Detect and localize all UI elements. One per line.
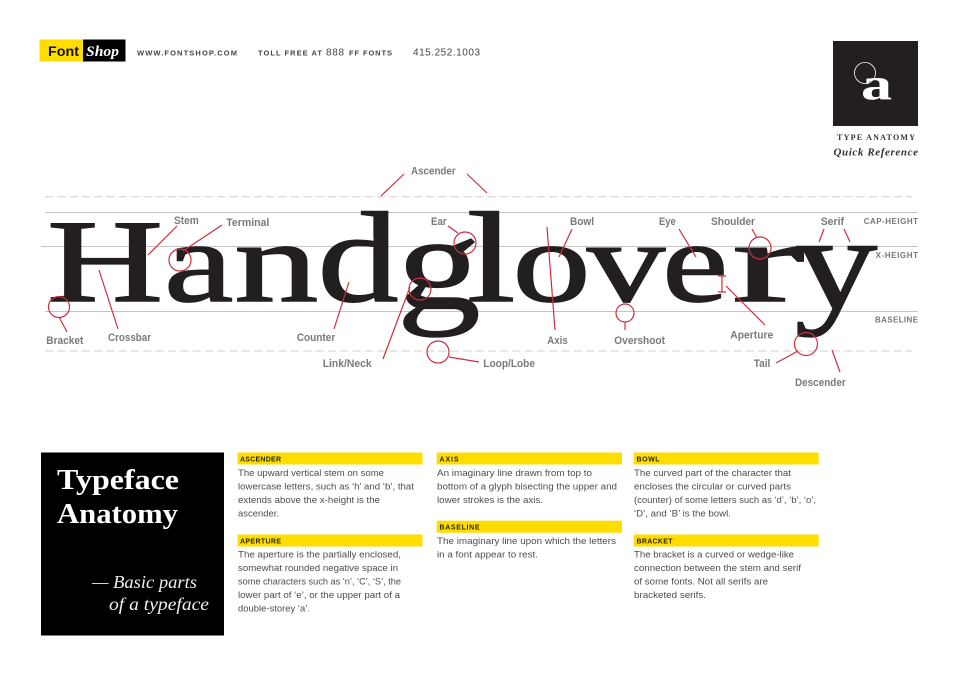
definition: bowl: ‘D’, and ‘B’ is the bowl. [634, 508, 731, 520]
callout: tail [754, 332, 818, 370]
specimen word: Handglovery: r [732, 199, 805, 326]
definition: aperture: somewhat rounded negative space in [238, 563, 398, 574]
badge title: TYPE ANATOMY [837, 133, 915, 142]
specimen word: Handglovery: d [318, 186, 399, 329]
definition: bracket: The bracket is a curved or wedge-like [634, 550, 794, 560]
toll free number: TOLL FREE AT [258, 48, 322, 57]
definition: bracket: connection between the stem and serif [634, 563, 801, 574]
callout: overshoot: Overshoot [614, 335, 665, 347]
callout: link/neck: Link/Neck [323, 358, 373, 370]
definition: axis: AXIS [440, 456, 459, 464]
definition: aperture: double-storey ‘a’. [238, 604, 310, 614]
callout: crossbar [99, 270, 152, 344]
definition: aperture: lower part of ‘e’, or the upper part of a [238, 590, 401, 601]
website address: WWW.FONTSHOP.COM [137, 48, 237, 57]
definition: bracket: BRACKET [636, 538, 673, 546]
callout: shoulder: Shoulder [711, 216, 756, 228]
definition: ascender: ASCENDER [240, 456, 281, 464]
icon: type anatomy badge [833, 41, 918, 126]
callout: bracket: Bracket [46, 335, 84, 347]
label: cap-height: CAP-HEIGHT [864, 217, 918, 226]
label: baseline: BASELINE [875, 316, 919, 325]
definition: aperture: The aperture is the partially enclosed, [238, 550, 401, 560]
panel: title block: — Basic parts [91, 572, 197, 592]
guide lines [41, 197, 918, 351]
badge subtitle: Quick Reference [834, 146, 918, 158]
definition: bowl: The curved part of the character that [634, 468, 791, 479]
definition: aperture [238, 534, 422, 614]
definition: bowl [634, 452, 819, 520]
callout: bowl: Bowl [570, 216, 594, 228]
callout: descender [795, 350, 846, 389]
phone number: 415.252.1003 [413, 48, 480, 58]
callout: terminal [169, 217, 269, 271]
definition: ascender [238, 452, 422, 520]
definition: baseline [437, 521, 622, 560]
specimen word: Handglovery: a [164, 199, 233, 326]
FontShop logo: Font [48, 43, 79, 59]
callout: descender: Descender [795, 377, 846, 389]
callout: axis [547, 227, 568, 347]
specimen word: Handglovery: v [587, 199, 666, 326]
definition: axis [437, 452, 622, 506]
definition: bowl: encloses the circular or curved parts [634, 482, 791, 492]
callout: ascender: Ascender [411, 166, 456, 178]
FontShop logo: Shop [86, 44, 120, 60]
definition: baseline: BASELINE [440, 525, 480, 532]
panel: title block [41, 452, 224, 636]
definition: axis: bottom of a glyph bisecting the upper and [437, 482, 617, 492]
definition: bowl: BOWL [636, 456, 660, 464]
definition: ascender: ascender. [238, 508, 279, 520]
definition: bowl: (counter) of some letters such as ‘d’, ‘b’, ‘o’, [634, 495, 816, 506]
specimen word: Handglovery: e [662, 199, 728, 326]
panel: title block: of a typeface [109, 594, 209, 614]
callout: stem: Stem [174, 215, 199, 227]
callout: terminal: Terminal [226, 217, 269, 229]
definition: aperture: some characters such as ‘n’, ‘C’, ‘S’, the [238, 576, 401, 588]
definition: axis: lower strokes is the axis. [437, 495, 543, 506]
specimen word: Handglovery [47, 186, 877, 337]
panel: title block: Anatomy [57, 498, 179, 530]
callout: crossbar: Crossbar [108, 332, 152, 344]
callout: stem [148, 215, 199, 255]
callout: eye [659, 216, 696, 257]
specimen word: Handglovery: H [47, 196, 163, 327]
toll free number: FF FONTS [349, 48, 392, 57]
callout: counter: Counter [297, 332, 336, 344]
callout: loop/lobe [427, 341, 535, 370]
definition: ascender: lowercase letters, such as ‘h’ and ‘b’, that [238, 482, 414, 492]
specimen word: Handglovery: l [467, 187, 516, 329]
label: x-height: X-HEIGHT [876, 251, 918, 260]
specimen word: Handglovery: y [795, 189, 877, 337]
definition: baseline: The imaginary line upon which the letters [437, 536, 616, 547]
callout: loop/lobe: Loop/Lobe [483, 358, 535, 370]
callout: link/neck [323, 278, 431, 370]
callout: tail: Tail [754, 358, 770, 370]
callout: counter [297, 282, 349, 344]
specimen word: Handglovery: n [234, 200, 318, 327]
callout: bracket [46, 296, 84, 347]
FontShop logo [40, 40, 126, 62]
callout: aperture: Aperture [730, 330, 773, 342]
callout: serif: Serif [821, 216, 844, 228]
callout: axis: Axis [547, 335, 568, 347]
definition: bracket: of some fonts. Not all serifs are [634, 576, 768, 588]
callout: ascender [381, 166, 487, 196]
specimen word: Handglovery: o [512, 199, 591, 326]
specimen word: Handglovery: g [397, 189, 480, 337]
callout: shoulder [711, 216, 771, 259]
callout: ear: Ear [431, 216, 447, 228]
definition: baseline: in a font appear to rest. [437, 550, 538, 560]
definition: ascender: extends above the x-height is the [238, 495, 380, 506]
definition: axis: An imaginary line drawn from top to [437, 468, 592, 479]
panel: title block: Typeface [57, 464, 179, 496]
callout: bowl [559, 216, 594, 257]
definition: bracket [634, 534, 819, 601]
callout: serif [819, 216, 850, 242]
definition: ascender: The upward vertical stem on some [238, 468, 384, 479]
callout: eye: Eye [659, 216, 676, 228]
definition: bracket: bracketed serifs. [634, 590, 706, 601]
toll free number: 888 [326, 47, 344, 58]
callout: ear [431, 216, 476, 254]
callout: overshoot [614, 304, 665, 347]
definition: aperture: APERTURE [240, 538, 281, 546]
icon: type anatomy badge: a [861, 58, 892, 110]
callout: aperture [718, 276, 773, 342]
